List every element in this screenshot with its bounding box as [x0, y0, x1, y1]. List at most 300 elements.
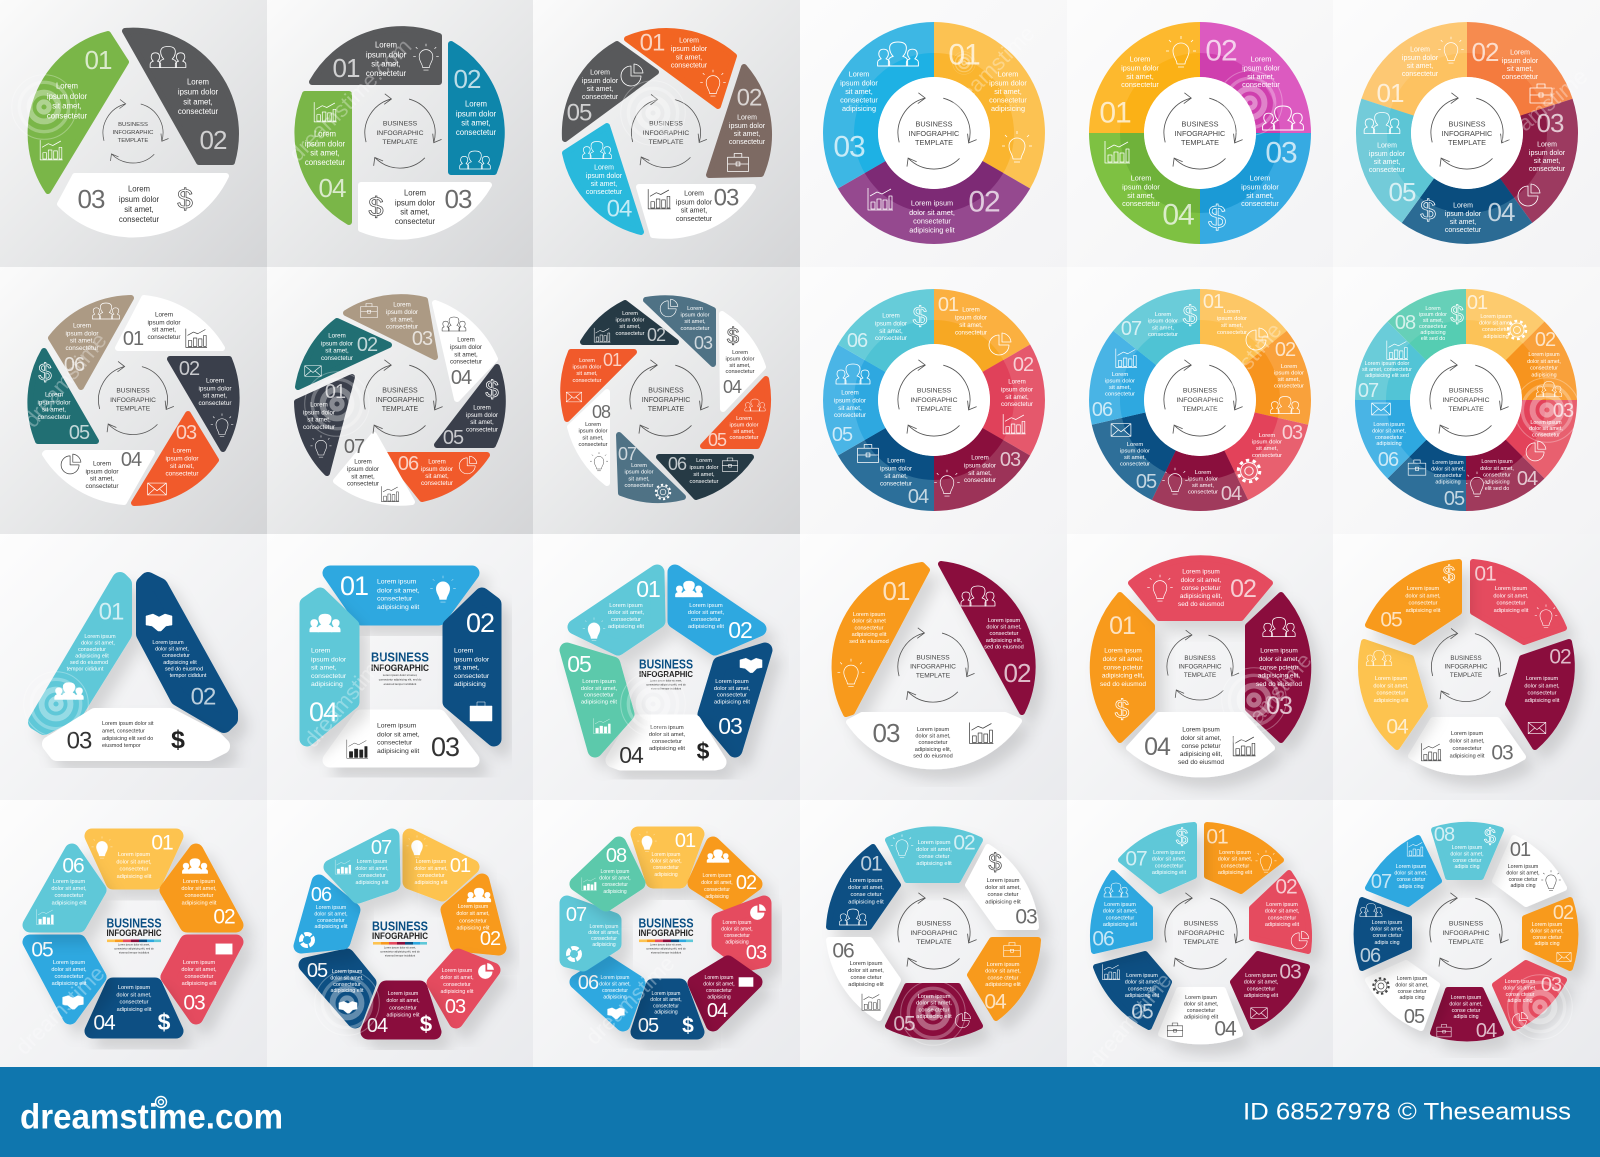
- number: 01: [1206, 826, 1228, 848]
- number: 03: [445, 184, 472, 214]
- icon: mail: [1528, 722, 1546, 734]
- icon: bulb: [1465, 472, 1489, 496]
- text: dolor sit amet,: [721, 926, 753, 932]
- segment 02: [1131, 558, 1270, 618]
- band: [1332, 372, 1438, 478]
- background: [800, 534, 1067, 801]
- text: sit amet,: [1124, 455, 1146, 461]
- number: 06: [832, 940, 854, 962]
- text: dolor sit amet,: [1479, 321, 1513, 327]
- band: [1227, 331, 1341, 446]
- text: adipisicing elit: [377, 747, 419, 754]
- text: consectetur: [421, 480, 453, 486]
- heading: INFOGRAPHIC: [106, 928, 162, 938]
- segment 01: [563, 350, 634, 419]
- icon: people: [460, 151, 490, 169]
- text: sit amet,: [582, 435, 604, 441]
- background: [1333, 267, 1600, 535]
- title: BUSINESS: [648, 388, 684, 394]
- segment 02: [675, 572, 759, 648]
- text: ipsum dolor: [386, 309, 418, 316]
- icon: dollar: $: [988, 850, 1002, 876]
- title: TEMPLATE: [1183, 938, 1219, 946]
- text: sit amet,: [400, 207, 430, 216]
- text: ipsum dolor: [1188, 476, 1218, 482]
- text: sit amet,: [152, 326, 176, 333]
- background: [267, 267, 534, 535]
- text: Lorem: [1131, 174, 1151, 182]
- number: 07: [1371, 871, 1392, 893]
- text: Lorem: [684, 190, 704, 198]
- number: 04: [908, 486, 929, 508]
- segment 08: [1434, 824, 1501, 877]
- icon: briefcase: [1167, 1023, 1183, 1036]
- icon: dollar: $: [177, 184, 193, 214]
- segment 01: [835, 565, 927, 714]
- segment 04: [970, 940, 1038, 1018]
- panel: seven-segment wheel with shadow: [1067, 800, 1334, 1067]
- footer banner: [0, 1067, 1600, 1157]
- text: consectetur: [1155, 863, 1183, 869]
- band: [1392, 147, 1532, 285]
- wedge: [941, 564, 1033, 712]
- icon: briefcase: [1408, 460, 1426, 475]
- number: 07: [1121, 318, 1142, 340]
- text: consectetur: [1409, 601, 1438, 607]
- text: Lorem: [314, 130, 336, 138]
- text: dolor sit amet,: [1394, 871, 1428, 877]
- number: 06: [668, 454, 687, 474]
- icon: ring: [568, 948, 580, 960]
- text: consectetur: [47, 111, 88, 120]
- text: conse ctetur: [988, 975, 1019, 981]
- text: ipsum dolor: [573, 365, 602, 371]
- band: [1494, 322, 1600, 428]
- panel: eight-segment donut: [1332, 266, 1600, 535]
- text: Lorem ipsum: [609, 603, 643, 609]
- text: Lorem ipsum: [650, 725, 684, 731]
- shape: [167, 851, 236, 925]
- text: sit amet,: [879, 327, 903, 334]
- center disc: [1144, 77, 1256, 189]
- text: dolor sit amet,: [916, 847, 952, 853]
- wedge: [1368, 963, 1437, 1028]
- shape: [92, 836, 176, 882]
- text: sit amet,: [968, 469, 992, 476]
- icon: dollar: $: [1484, 826, 1496, 848]
- text: Lorem: [1112, 372, 1128, 378]
- text: Lorem ipsum: [715, 679, 749, 685]
- icon: dollar: $: [727, 324, 739, 348]
- band: [1200, 289, 1287, 365]
- segment 01: [1466, 289, 1544, 360]
- text: dolor sit amet,: [915, 734, 951, 740]
- text: adipis cing: [1534, 941, 1560, 947]
- title: INFOGRAPHIC: [1442, 396, 1490, 404]
- text: dolor sit amet,: [848, 968, 884, 974]
- text: sit amet,: [1127, 190, 1155, 199]
- text: consectetur: [586, 188, 623, 196]
- icon: gear: [1373, 978, 1389, 994]
- watermark overlay: dreamstime: [11, 961, 109, 1059]
- text: conse ctetur: [1509, 877, 1538, 883]
- icon: mail: [566, 392, 582, 402]
- text: consectetur: [321, 354, 353, 361]
- text: Lorem ipsum: [1481, 459, 1513, 465]
- text: sit amet,: [1407, 62, 1433, 70]
- text: dolor sit amet,: [1218, 857, 1253, 863]
- text: adipisicing elit: [985, 982, 1021, 988]
- title: INFOGRAPHIC: [1442, 930, 1490, 936]
- wedge: [970, 940, 1038, 1018]
- number: 04: [1488, 197, 1515, 227]
- text: Lorem: [696, 458, 712, 464]
- number: 01: [1474, 562, 1496, 586]
- segment 02: [451, 44, 502, 172]
- text: consectetur: [377, 739, 413, 746]
- band: [1200, 22, 1311, 133]
- number: 04: [367, 1015, 388, 1037]
- panel: rounded square: [267, 534, 534, 801]
- text: Lorem ipsum: [152, 640, 184, 646]
- text: Lorem ipsum: [988, 618, 1020, 624]
- number: 02: [1549, 646, 1571, 668]
- heading: [638, 916, 694, 954]
- text: ipsum dolor: [466, 412, 498, 419]
- text: amet, consectetur: [102, 728, 145, 734]
- heading: eiusmod tempor incididunt: [119, 950, 149, 954]
- text: Lorem: [887, 458, 905, 464]
- icon: people: [310, 614, 340, 632]
- text: consectetur: [1482, 327, 1510, 333]
- text: consectetur: [1001, 401, 1033, 408]
- icon: pie chart: [955, 1012, 971, 1028]
- title: TEMPLATE: [1448, 938, 1484, 946]
- icon: chart: [40, 140, 63, 160]
- segment 02: [583, 303, 676, 345]
- segment 06: [577, 963, 638, 1024]
- number: 01: [1099, 96, 1131, 130]
- segment 02: [709, 67, 769, 175]
- background: [533, 267, 800, 535]
- text: dolor sit amet,: [1259, 656, 1300, 663]
- number: 05: [307, 960, 328, 982]
- title: TEMPLATE: [1448, 138, 1486, 146]
- text: elit sed do: [1485, 486, 1509, 492]
- text: sit amet,: [1246, 190, 1274, 199]
- text: Lorem ipsum: [652, 852, 680, 858]
- number: 01: [85, 45, 112, 75]
- text: Lorem ipsum: [850, 961, 882, 967]
- text: consectetur: [955, 329, 987, 336]
- icon: pie chart: [660, 299, 678, 317]
- panel: five-segment donut: [1316, 0, 1600, 285]
- text: Lorem: [404, 188, 426, 198]
- number: 02: [357, 334, 378, 356]
- segment 06: [51, 298, 131, 387]
- watermark overlay: dreamstime: [1223, 648, 1317, 752]
- text: Lorem: [1250, 174, 1270, 182]
- text: consectetur: [1434, 473, 1462, 479]
- panel: six-segment circle: [0, 267, 267, 535]
- segment 02: [298, 321, 389, 387]
- icon: chart: [970, 723, 993, 743]
- icon: chart: [594, 328, 610, 342]
- background: [1067, 800, 1334, 1067]
- icon: dollar: $: [485, 376, 499, 404]
- center disc: [1411, 77, 1523, 189]
- number: 08: [592, 402, 611, 422]
- text: adipisicing elit: [1218, 870, 1253, 876]
- text: Lorem ipsum: [1526, 676, 1558, 682]
- text: Lorem ipsum: [1396, 864, 1426, 870]
- title: BUSINESS: [916, 120, 952, 128]
- text: Lorem ipsum: [357, 859, 387, 865]
- text: adipisicing: [705, 894, 729, 900]
- segment 01: [1200, 289, 1287, 365]
- wedge: [583, 303, 676, 342]
- text: adipisicing elit: [457, 926, 490, 932]
- text: dolor sit amet: [852, 619, 886, 625]
- shape: [577, 844, 638, 904]
- text: consectetur: [724, 933, 750, 939]
- panel: rounded triangle: [0, 534, 267, 801]
- text: sit amet,: [729, 363, 751, 369]
- segment 06: [659, 454, 751, 497]
- number: 08: [606, 845, 627, 867]
- text: adipisicing: [842, 104, 876, 112]
- text: dolor sit amet,: [650, 997, 682, 1003]
- text: dolor sit amet,: [985, 885, 1021, 891]
- icon: chart: [1003, 414, 1026, 434]
- background: [800, 267, 1067, 535]
- text: Lorem: [998, 70, 1018, 78]
- text: dolor sit amet,: [1395, 982, 1429, 988]
- text: adipisicing: [991, 104, 1025, 112]
- text: consectetur: [366, 68, 407, 77]
- segment 01: [92, 832, 176, 882]
- text: sit amet,: [351, 473, 375, 480]
- number: 03: [1491, 742, 1513, 764]
- number: 04: [451, 367, 472, 389]
- icon: dollar: $: [1176, 824, 1188, 850]
- text: Lorem: [465, 100, 487, 108]
- text: Lorem: [93, 460, 111, 468]
- icon: gear: [1238, 460, 1260, 482]
- icon: dollar: $: [697, 738, 710, 764]
- title: BUSINESS: [649, 120, 683, 128]
- text: consectetur: [1419, 324, 1447, 330]
- segment 06: [1332, 372, 1438, 478]
- wedge: [565, 44, 656, 139]
- number: 03: [1537, 108, 1564, 138]
- text: dolor sit amet,: [386, 998, 420, 1004]
- band: [1137, 431, 1248, 538]
- text: consectetur: [386, 323, 418, 330]
- watermark overlay: dreamstime: [298, 648, 392, 752]
- text: consectetur: [591, 936, 617, 942]
- wedge: [170, 359, 237, 449]
- text: Lorem: [882, 312, 900, 320]
- text: Lorem ipsum: [689, 603, 723, 609]
- text: consectetur: [443, 982, 471, 988]
- band: [1361, 0, 1483, 128]
- heading: eiusmod tempor incididunt: [651, 950, 681, 954]
- text: Lorem ipsum: [917, 727, 949, 733]
- text: adipisicing elit: [649, 746, 685, 752]
- icon: pie chart: [61, 454, 81, 474]
- heading: INFOGRAPHIC: [372, 931, 428, 941]
- segment 01: [1361, 0, 1483, 128]
- text: Lorem: [679, 38, 699, 44]
- text: consectetur: [55, 974, 84, 980]
- icon: chart: [1105, 141, 1130, 163]
- text: ipsum dolor: [311, 656, 347, 663]
- number: 03: [746, 942, 767, 964]
- wedge: [118, 298, 222, 348]
- segment 07: [618, 435, 683, 500]
- heading: Lorem ipsum dolor sit amet,: [650, 942, 682, 946]
- segment 06: [1072, 323, 1166, 425]
- wedge: [1361, 642, 1425, 747]
- icon: dollar: $: [1443, 562, 1455, 586]
- cycle arrows: [1165, 893, 1254, 984]
- number: 01: [450, 855, 471, 877]
- text: Lorem ipsum: [183, 960, 215, 966]
- text: Lorem ipsum: [1104, 902, 1136, 908]
- number: 04: [121, 449, 142, 471]
- title: TEMPLATE: [118, 138, 148, 144]
- icon: mail: [1111, 424, 1131, 436]
- text: sit amet,: [203, 392, 227, 399]
- heading: BUSINESS: [639, 656, 693, 672]
- number: 08: [1395, 312, 1416, 334]
- text: Lorem: [206, 378, 224, 384]
- title: BUSINESS: [916, 654, 950, 662]
- number: 05: [1136, 471, 1157, 493]
- number: 01: [640, 30, 665, 56]
- icon: people: [1263, 618, 1295, 636]
- text: adipisicing: [654, 1010, 678, 1016]
- text: adipisicing elit: [1244, 993, 1279, 999]
- cycle arrows: [898, 628, 985, 717]
- shape: [567, 903, 614, 964]
- background: [0, 267, 267, 535]
- text: consectetur: [162, 653, 190, 659]
- text: consectetur: [1128, 986, 1156, 992]
- segment 03: [910, 414, 1030, 539]
- cycle arrows: [1431, 93, 1520, 184]
- text: consectetur: [1377, 691, 1406, 697]
- text: Lorem ipsum: [84, 634, 116, 640]
- text: consectetur: [165, 470, 199, 477]
- text: Lorem ipsum: [118, 852, 150, 858]
- text: adipisicing: [707, 994, 731, 1000]
- text: dolor sit amet,: [1449, 1001, 1483, 1007]
- text: adipisicing: [725, 940, 749, 946]
- text: dolor sit amet,: [155, 647, 189, 653]
- text: adipisicing elit,: [1180, 750, 1222, 758]
- background: [533, 800, 800, 1067]
- segment 02: [1467, 22, 1573, 116]
- icon: chart: [335, 860, 351, 874]
- segment 04: [1438, 428, 1544, 534]
- text: Lorem: [962, 306, 980, 314]
- logo swirl: [156, 1096, 166, 1108]
- background: [1333, 0, 1600, 268]
- number: 02: [736, 872, 757, 894]
- number: 07: [1125, 848, 1147, 870]
- text: dolor sit amet,: [581, 686, 618, 692]
- text: sed do eiusmod: [1100, 680, 1146, 687]
- icon: mail: [1251, 1008, 1267, 1018]
- text: ipsum dolor: [579, 429, 608, 435]
- title: TEMPLATE: [382, 406, 419, 412]
- text: consectetur: [459, 918, 487, 924]
- segment 02: [1494, 322, 1600, 428]
- heading: INFOGRAPHIC: [639, 669, 693, 679]
- icon: briefcase: [722, 458, 738, 471]
- number: 03: [431, 732, 459, 762]
- icon: chart: [382, 486, 399, 502]
- number: 02: [179, 358, 200, 380]
- text: Lorem: [841, 390, 859, 396]
- text: ipsum dolor: [321, 340, 353, 347]
- segment 03: [134, 414, 216, 503]
- text: consectetur: [395, 216, 436, 225]
- text: Lorem: [687, 306, 703, 312]
- text: adipisicing elit: [117, 874, 152, 880]
- text: Lorem ipsum: [1505, 979, 1535, 985]
- cycle arrows: [103, 100, 177, 176]
- wedge: [437, 367, 503, 445]
- icon: pie chart: [989, 333, 1011, 355]
- segment 04: [1392, 147, 1532, 285]
- icon: mail: [1372, 403, 1390, 415]
- icon: bulb: [310, 435, 332, 457]
- watermark overlay: dreamstime: [18, 328, 112, 432]
- number: 07: [1358, 380, 1379, 402]
- text: Lorem: [310, 402, 328, 408]
- text: ipsum dolor: [729, 122, 766, 130]
- number: 04: [984, 990, 1007, 1014]
- title: INFOGRAPHIC: [1176, 396, 1224, 404]
- wedge: [565, 126, 641, 232]
- text: adipisicing elit: [117, 1007, 152, 1013]
- text: consectetur: [358, 873, 386, 879]
- segment 01: [31, 34, 126, 191]
- text: ipsum dolor: [1274, 370, 1304, 376]
- number: 02: [968, 186, 1000, 218]
- text: sit amet,: [461, 118, 491, 127]
- text: Lorem: [187, 78, 209, 86]
- text: sit amet,: [371, 59, 401, 68]
- wedge: [336, 435, 412, 503]
- text: Lorem ipsum: [1104, 648, 1142, 654]
- cycle arrows: [1430, 360, 1519, 451]
- icon: handshake: [63, 996, 83, 1009]
- text: ipsum dolor: [178, 87, 219, 96]
- icon: bulb: [92, 836, 112, 858]
- text: conse pctetur: [1181, 742, 1221, 750]
- segment 05: [565, 44, 656, 139]
- segment 04: [297, 94, 349, 222]
- icon: bulb: [413, 44, 439, 70]
- icon: pie chart: [1512, 1012, 1528, 1028]
- text: sit amet,: [1109, 385, 1131, 391]
- text: Lorem: [1537, 142, 1557, 148]
- icon: chart: [582, 877, 597, 891]
